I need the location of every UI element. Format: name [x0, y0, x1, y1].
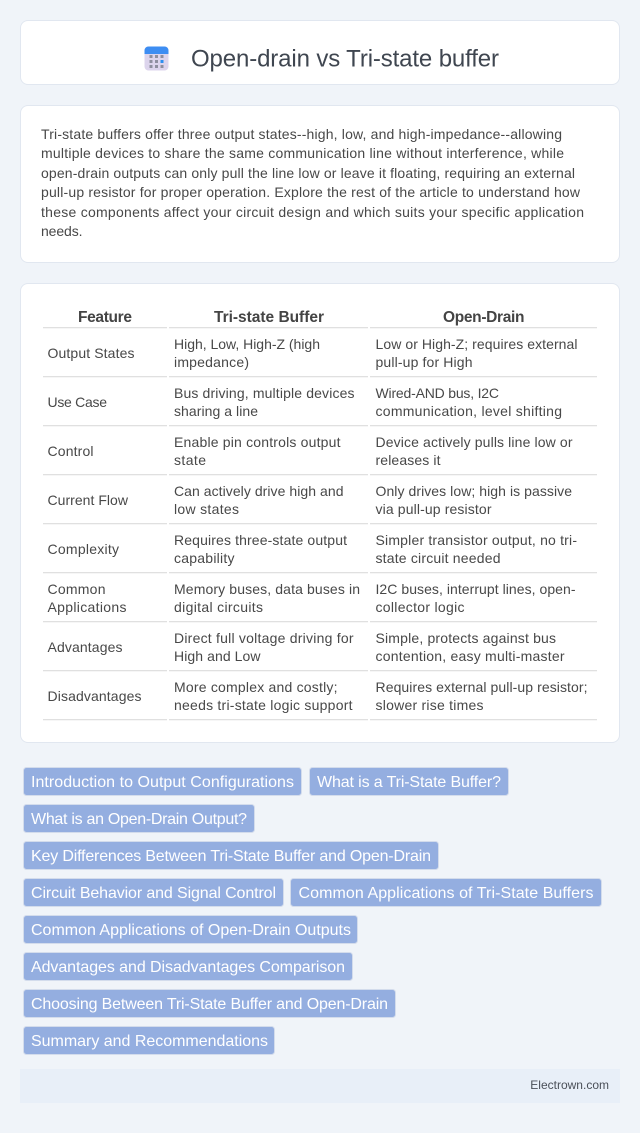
row: common applications: [48, 581, 576, 615]
tag: Common Applications of Open-Drain Outputs: [31, 922, 351, 939]
row: common applications: I2C buses, interrupt lines, open-: [376, 581, 576, 597]
row: output states: impedance): [174, 354, 249, 370]
title: Open-drain vs Tri-state buffer: [191, 46, 499, 72]
intro text panel: [20, 105, 620, 263]
row: use case: Wired-AND bus, I2C: [376, 385, 499, 401]
row: control: state: [174, 452, 206, 468]
row: output states: Low or High-Z; requires external: [376, 336, 578, 352]
intro paragraph: multiple devices to share the same communication line without interference, while: [41, 145, 564, 161]
tag: [24, 990, 396, 1018]
row: output states: pull-up for High: [376, 354, 472, 370]
tag: [24, 804, 254, 832]
tag: Circuit Behavior and Signal Control: [31, 885, 276, 902]
table header: [78, 309, 524, 326]
row: current flow: Current Flow: [48, 492, 129, 508]
intro paragraph: open-drain outputs can only pull the line low or leave it floating, requiring an external: [41, 165, 575, 181]
row: control: Enable pin controls output: [174, 434, 341, 450]
table header: Feature: [78, 309, 132, 326]
tag: [24, 916, 358, 944]
row: disadvantages: [48, 679, 588, 713]
row: output states: [48, 336, 578, 370]
row: advantages: Advantages: [48, 639, 122, 655]
row: common applications: Common: [48, 581, 106, 597]
row: disadvantages: Requires external pull-up resistor;: [376, 679, 588, 695]
row: control: [48, 434, 573, 468]
comparison table: [43, 309, 597, 720]
row: complexity: Simpler transistor output, no tri-: [376, 532, 577, 548]
row: use case: communication, level shifting: [376, 403, 562, 419]
tag: [24, 878, 284, 906]
table header: Open-Drain: [443, 309, 524, 326]
row: common applications: digital circuits: [174, 599, 263, 615]
row: complexity: Complexity: [48, 541, 119, 557]
tag: Key Differences Between Tri-State Buffer and Open-Drain: [31, 848, 431, 865]
row: common applications: Applications: [48, 599, 126, 615]
row: complexity: capability: [174, 550, 234, 566]
row: current flow: via pull-up resistor: [376, 501, 492, 517]
row: disadvantages: slower rise times: [376, 697, 484, 713]
row: advantages: contention, easy multi-master: [376, 648, 565, 664]
row: advantages: Direct full voltage driving for: [174, 630, 354, 646]
row: current flow: Only drives low; high is passive: [376, 483, 572, 499]
intro paragraph: Tri-state buffers offer three output states--high, low, and high-impedance--allowing: [41, 126, 562, 142]
intro paragraph: [41, 126, 584, 239]
tag: What is a Tri-State Buffer?: [317, 774, 501, 791]
tag: Introduction to Output Configurations: [31, 774, 294, 791]
row: common applications: collector logic: [376, 599, 464, 615]
row: output states: High, Low, High-Z (high: [174, 336, 320, 352]
tag: [24, 768, 302, 796]
tag: Common Applications of Tri-State Buffers: [298, 885, 594, 902]
topic tags: [23, 767, 602, 1055]
row: control: Control: [48, 443, 94, 459]
table header: Tri-state Buffer: [214, 309, 324, 326]
row: common applications: Memory buses, data buses in: [174, 581, 360, 597]
tag: [290, 878, 602, 906]
row: advantages: Simple, protects against bus: [376, 630, 556, 646]
header panel: [20, 20, 620, 85]
tag: [24, 1026, 274, 1054]
footer: [20, 1069, 620, 1103]
row: use case: Use Case: [48, 394, 107, 410]
tag: [24, 952, 352, 980]
row: current flow: low states: [174, 501, 239, 517]
tag: Advantages and Disadvantages Comparison: [31, 959, 345, 976]
row: disadvantages: Disadvantages: [48, 688, 142, 704]
intro paragraph: needs.: [41, 223, 82, 239]
tag: Summary and Recommendations: [31, 1033, 268, 1050]
row: use case: sharing a line: [174, 403, 258, 419]
row: complexity: Requires three-state output: [174, 532, 347, 548]
tag: [24, 842, 438, 870]
tag: What is an Open-Drain Output?: [31, 811, 247, 828]
row: advantages: [48, 630, 565, 664]
intro paragraph: these components affect your circuit design and which suits your specific application: [41, 204, 584, 220]
tag: Choosing Between Tri-State Buffer and Open-Drain: [31, 996, 388, 1013]
footer credit: Electrown.com: [530, 1078, 609, 1092]
row: disadvantages: More complex and costly;: [174, 679, 338, 695]
row: current flow: [48, 483, 572, 517]
row: control: Device actively pulls line low or: [376, 434, 573, 450]
icon: calendar: [144, 46, 168, 70]
comparison table panel: [20, 283, 620, 743]
row: output states: Output States: [48, 345, 134, 361]
row: complexity: state circuit needed: [376, 550, 500, 566]
row: use case: [48, 385, 562, 419]
intro paragraph: pull-up resistor for proper operation. Explore the rest of the article to understand how: [41, 184, 581, 200]
row: complexity: [48, 532, 577, 566]
row: control: releases it: [376, 452, 441, 468]
tag: [310, 768, 508, 796]
row: current flow: Can actively drive high and: [174, 483, 344, 499]
row: disadvantages: needs tri-state logic support: [174, 697, 353, 713]
row: advantages: High and Low: [174, 648, 261, 664]
row: use case: Bus driving, multiple devices: [174, 385, 354, 401]
